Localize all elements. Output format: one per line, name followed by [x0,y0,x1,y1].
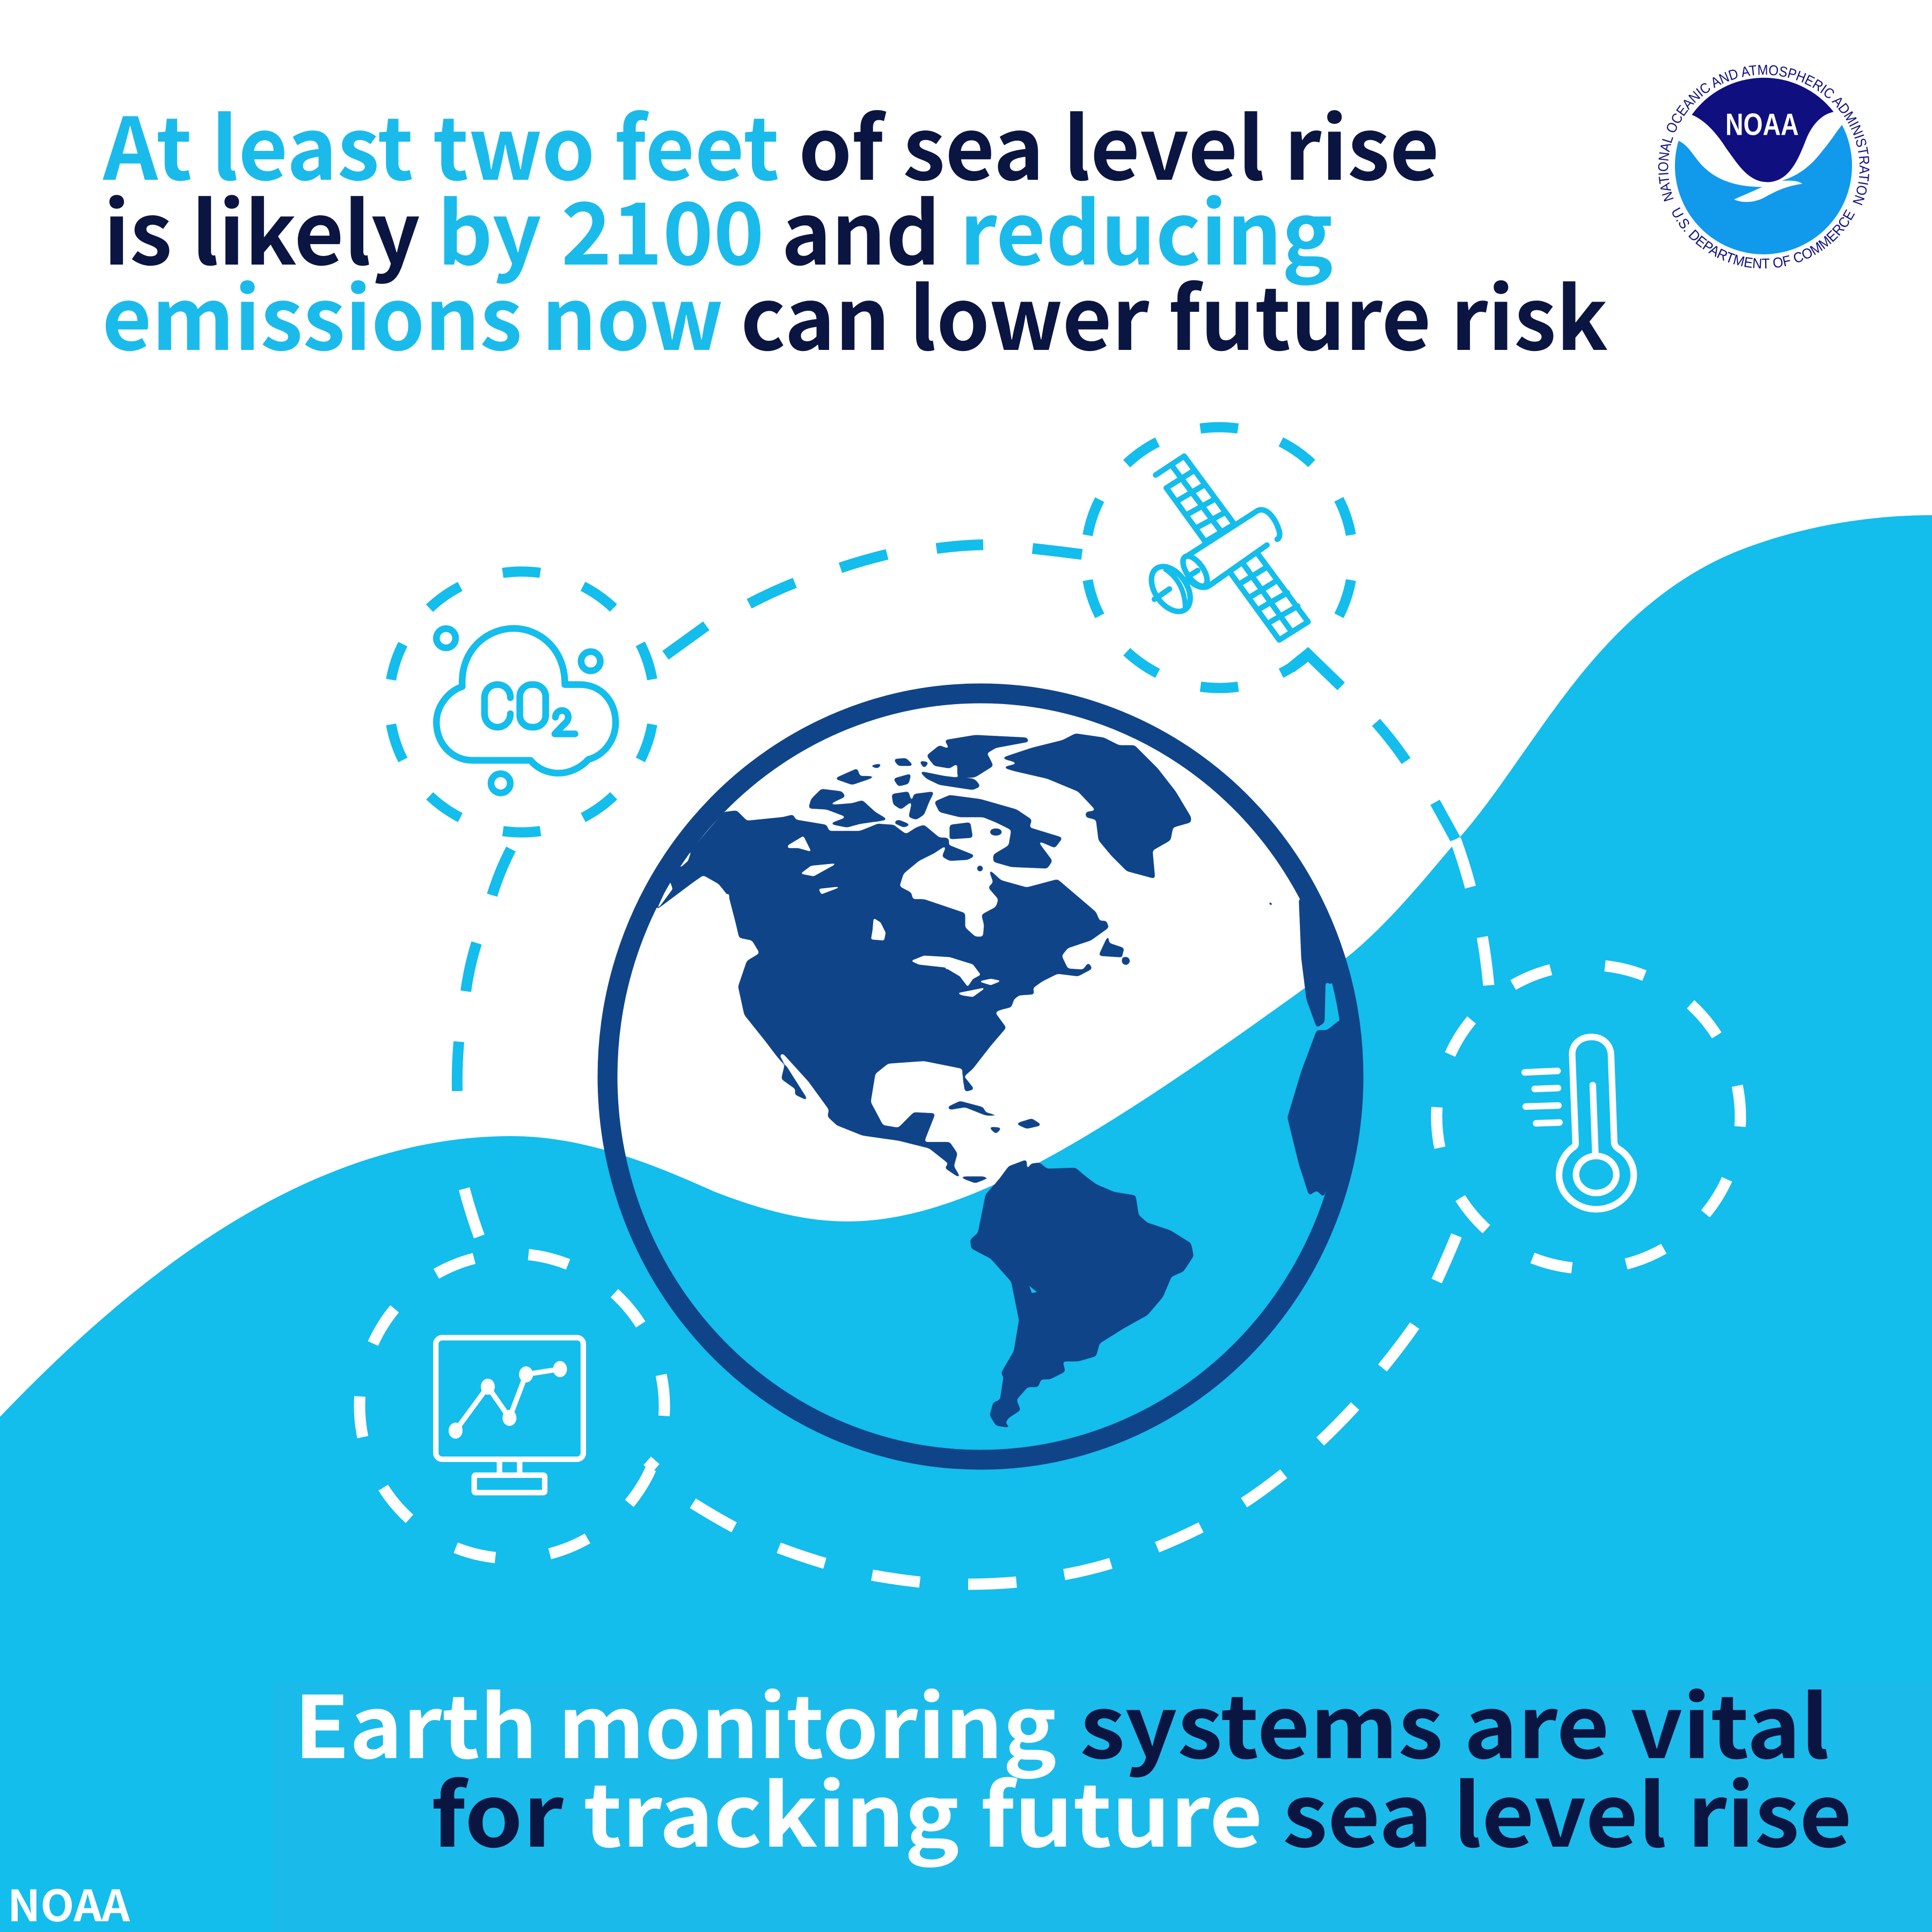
CO2 icon group [389,572,654,832]
title: and [781,165,940,290]
title: by 2100 [437,165,764,290]
title: is likely [104,165,420,290]
dashed ring: monitor [332,1226,692,1586]
bottom statement [294,1659,1852,1872]
NOAA logo [1658,64,1870,268]
monitor icon group [332,1226,692,1586]
logo wordmark: NOAA [1725,108,1799,142]
icon: thermometer [1525,1037,1634,1209]
Africa edge [1287,1020,1360,1197]
Caribbean islands [947,1101,1009,1117]
Greenland [1001,734,1191,879]
satellite icon group [1086,427,1353,688]
icon: monitor chart [436,1338,583,1492]
title: At least two feet [103,80,779,205]
title: reducing [960,165,1333,290]
dashed connecting path [457,545,1489,1584]
icon: CO2 cloud [436,628,616,793]
thermometer icon group [1409,937,1768,1297]
logo sky [1692,78,1834,182]
globe [608,693,1360,1460]
bottom text band tint [274,1681,1932,1932]
icon: satellite [1144,456,1308,640]
North and Central America [655,810,1109,1183]
bottom statement: for [431,1747,564,1872]
globe ring [608,693,1353,1460]
logo ring text: NATIONAL OCEANIC AND ATMOSPHERIC ADMINISTRATION [1658,64,1870,205]
logo ring text [1658,64,1870,268]
lakes and inland water [656,836,1001,997]
ocean wave background [0,515,1932,1932]
logo ring text: U.S. DEPARTMENT OF COMMERCE [1672,207,1855,268]
bottom statement: tracking future [583,1747,1263,1872]
South America [970,1160,1194,1428]
continent landmasses [655,734,1360,1428]
Atlantic Canada islands [1099,934,1124,957]
title: emissions now [102,251,723,375]
dashed ring: CO2 [389,572,654,832]
bottom statement: systems are vital [1080,1659,1829,1783]
title: can lower future risk [741,251,1608,375]
bottom statement: sea level rise [1283,1747,1852,1872]
dashed ring: satellite [1086,427,1353,688]
logo ocean [1675,125,1852,254]
title: of sea level rise [799,80,1439,205]
Europe edge [1299,897,1345,1028]
continents [655,734,1360,1428]
bottom statement: Earth monitoring [294,1659,1057,1783]
dashed ring: thermometer [1409,937,1768,1297]
title [102,80,1608,375]
Arctic islands [934,795,1063,868]
